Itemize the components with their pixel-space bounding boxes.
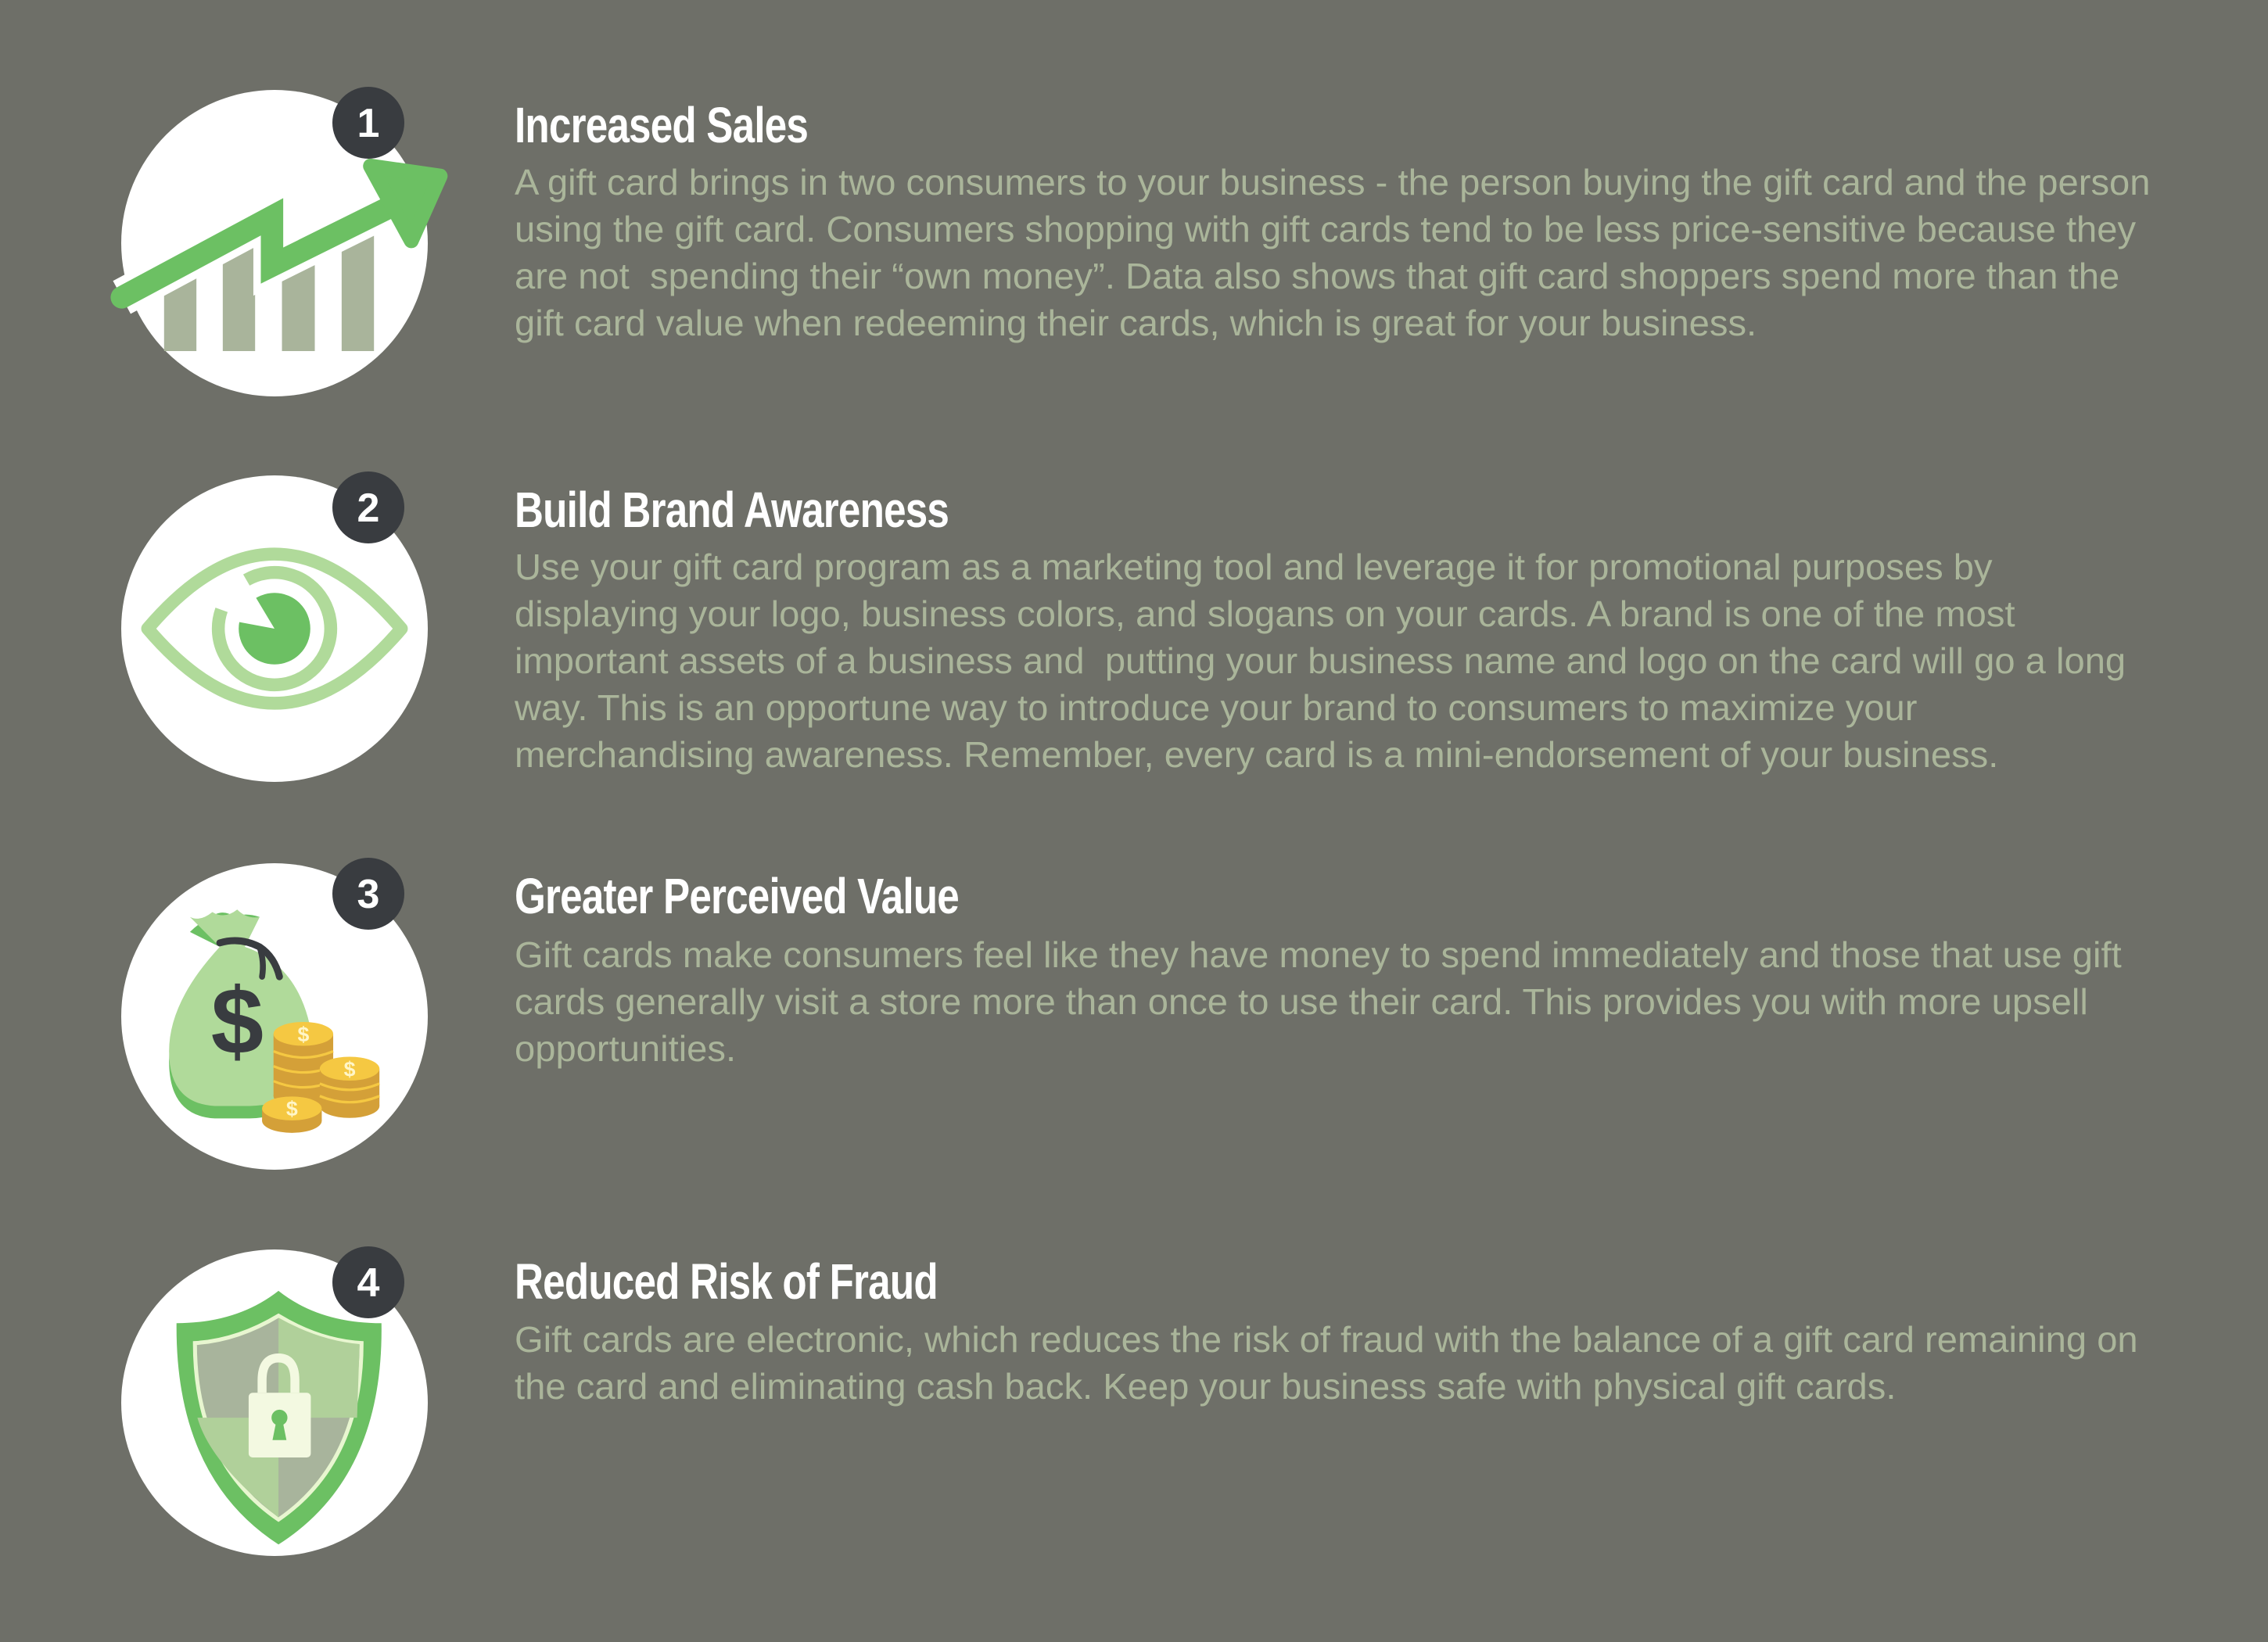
text block 2: Use your gift card program as a marketing tool and leverage it for promotional purposes by [515, 547, 1993, 587]
badge 2 [332, 471, 404, 543]
icon: money bag and coins: $ [286, 1097, 298, 1120]
text block 1: A gift card brings in two consumers to your business - the person buying the gift card and the person [515, 162, 2150, 203]
text block 2: important assets of a business and putting your business name and logo on the card will go a long [515, 640, 2126, 681]
badge 1: 1 [357, 101, 379, 146]
text block 4: the card and eliminating cash back. Keep your business safe with physical gift cards. [515, 1366, 1896, 1407]
text block 1 [515, 162, 2150, 343]
heading 2: Build Brand Awareness [515, 482, 949, 538]
icon: eye [121, 471, 428, 782]
text block 2: merchandising awareness. Remember, every card is a mini-endorsement of your business. [515, 734, 1998, 775]
text block 1: using the gift card. Consumers shopping with gift cards tend to be less price-sensitive because they [515, 209, 2136, 249]
icon: money bag and coins: $ [211, 969, 264, 1074]
text block 1: are not spending their “own money”. Data also shows that gift card shoppers spend more than the [515, 256, 2119, 296]
badge 1 [332, 87, 404, 159]
text block 2 [515, 547, 2126, 775]
heading 3: Greater Perceived Value [515, 868, 959, 924]
icon: money bag and coins: $ [344, 1057, 356, 1081]
icon: increased sales chart [121, 87, 440, 396]
heading 4: Reduced Risk of Fraud [515, 1253, 938, 1310]
icon: shield with lock [121, 1246, 428, 1556]
badge 3 [332, 858, 404, 930]
icon: money bag and coins: $ [297, 1023, 309, 1046]
heading 1: Increased Sales [515, 97, 808, 153]
text block 4: Gift cards are electronic, which reduces the risk of fraud with the balance of a gift card remaining on [515, 1319, 2138, 1360]
badge 4 [332, 1246, 404, 1318]
text block 3: Gift cards make consumers feel like they have money to spend immediately and those that use gift [515, 934, 2122, 975]
text block 4 [515, 1319, 2138, 1407]
icon: money bag and coins [121, 858, 428, 1170]
badge 4: 4 [357, 1260, 380, 1306]
badge 2: 2 [357, 486, 379, 531]
text block 2: displaying your logo, business colors, and slogans on your cards. A brand is one of the most [515, 593, 2015, 634]
text block 2: way. This is an opportune way to introduce your brand to consumers to maximize your [515, 687, 1917, 728]
text block 3 [515, 934, 2122, 1069]
text block 3: opportunities. [515, 1028, 736, 1069]
text block 3: cards generally visit a store more than once to use their card. This provides you with more upsell [515, 981, 2088, 1022]
badge 3: 3 [357, 872, 379, 917]
text block 1: gift card value when redeeming their cards, which is great for your business. [515, 303, 1757, 343]
